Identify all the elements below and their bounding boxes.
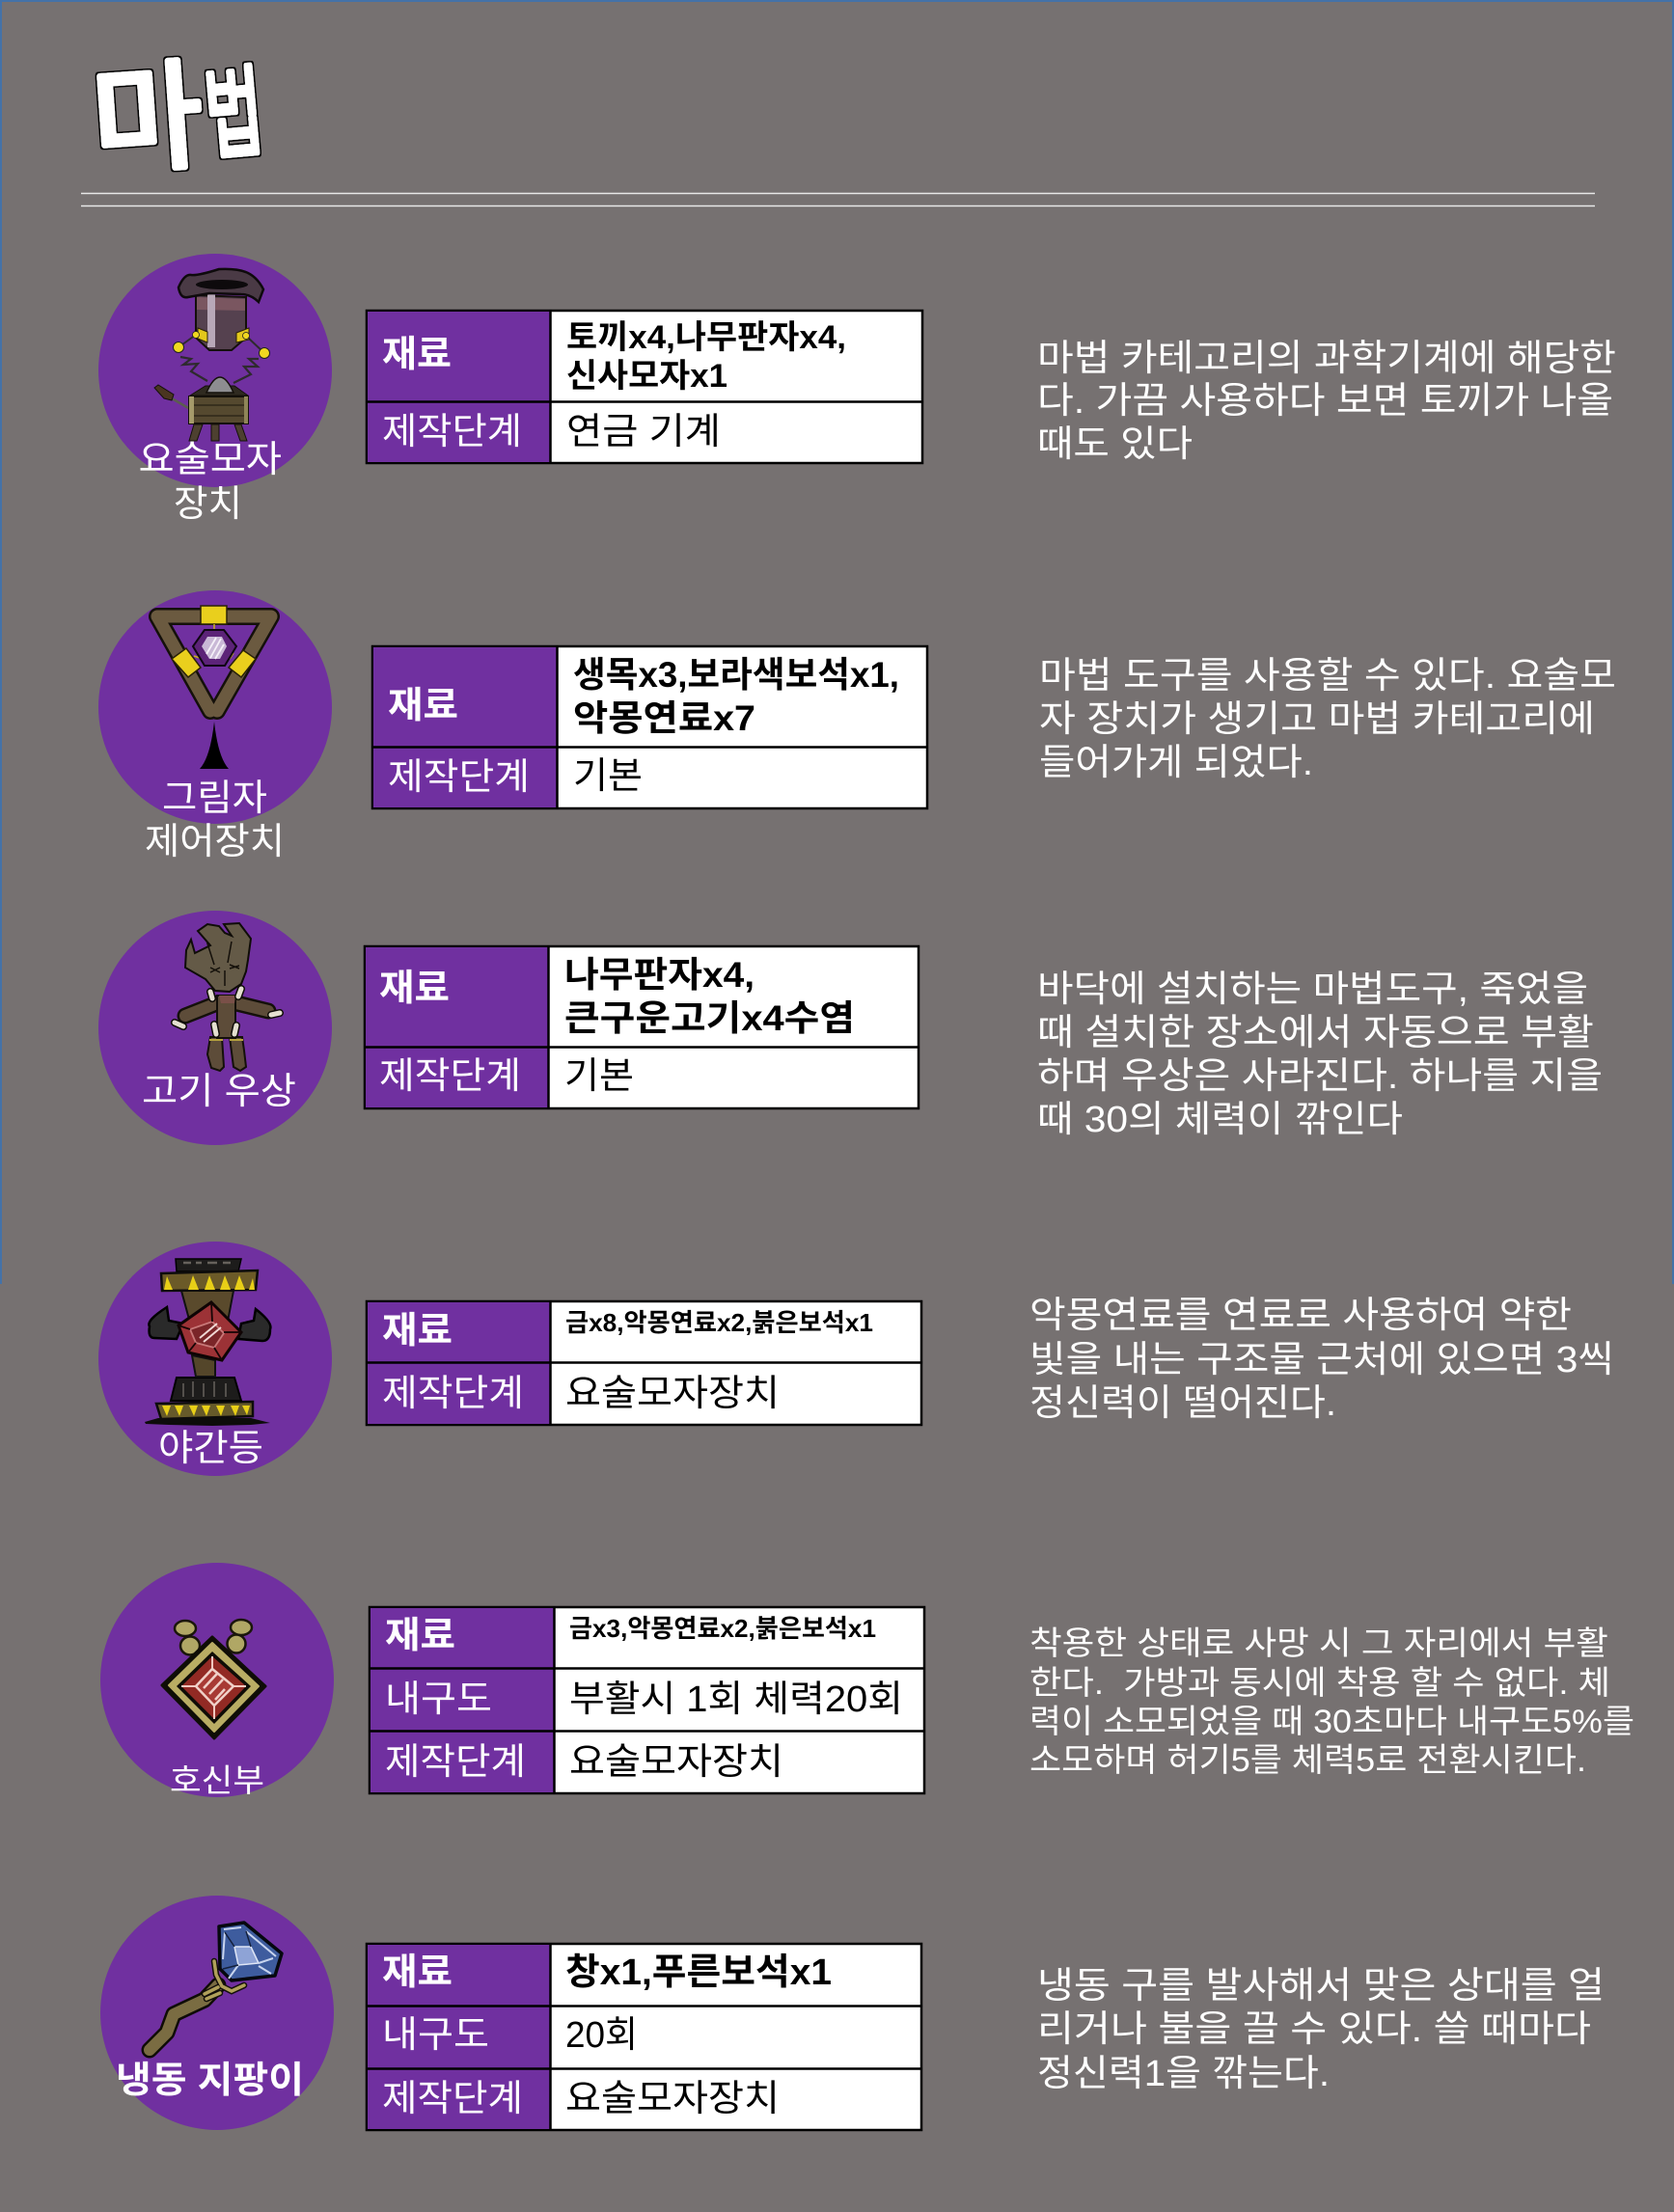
description: 요술모자 장치: 다. 가끔 사용하다 보면 토끼가 나올	[1037, 381, 1613, 422]
table: 고기 우상: 큰구운고기x4수염	[564, 998, 855, 1038]
description: 야간등: 정신력이 떨어진다.	[1029, 1383, 1336, 1424]
description: 호신부: 력이 소모되었을 때 30초마다 내구도5%를	[1029, 1704, 1634, 1740]
label: 요술모자 장치: 장치	[174, 484, 242, 525]
icon: night light	[145, 1259, 270, 1426]
table: 고기 우상: 나무판자x4,	[564, 955, 755, 995]
table: 냉동 지팡이	[367, 1944, 921, 2130]
icon: ice staff	[150, 1923, 282, 2050]
table: 냉동 지팡이: 20회	[565, 2015, 638, 2056]
description: 그림자 제어장치: 들어가게 되었다.	[1039, 743, 1313, 783]
table: 야간등: 요술모자장치	[565, 1374, 780, 1414]
table: 호신부: 부활시 1회 체력20회	[569, 1679, 903, 1720]
table: 냉동 지팡이: 내구도	[382, 2015, 489, 2056]
panel: 냉동 지팡이 badge	[100, 1896, 334, 2130]
description: 야간등: 악몽연료를 연료로 사용하여 약한	[1029, 1296, 1572, 1336]
table: 요술모자 장치: 신사모자x1	[566, 358, 727, 395]
description: 고기 우상: 때 설치한 장소에서 자동으로 부활	[1037, 1013, 1594, 1053]
title	[88, 50, 267, 190]
label: 요술모자 장치: 요술모자	[139, 440, 282, 480]
description: 호신부	[1029, 1625, 1634, 1779]
description: 호신부: 한다. 가방과 동시에 착용 할 수 없다. 체	[1029, 1665, 1610, 1702]
description: 냉동 지팡이	[1037, 1966, 1605, 2094]
description: 그림자 제어장치: 자 장치가 생기고 마법 카테고리에	[1039, 699, 1595, 740]
table: 호신부: 내구도	[385, 1679, 492, 1720]
table: 냉동 지팡이: 제작단계	[382, 2079, 523, 2119]
description: 그림자 제어장치: 마법 도구를 사용할 수 있다. 요술모	[1039, 656, 1616, 696]
label: 요술모자 장치	[139, 440, 282, 525]
table: 야간등: 재료	[382, 1311, 453, 1352]
table: 냉동 지팡이: 재료	[382, 1953, 453, 1993]
description: 요술모자 장치: 때도 있다	[1037, 424, 1193, 465]
description: 고기 우상: 때 30의 체력이 깎인다	[1037, 1100, 1403, 1140]
table: 고기 우상: 재료	[379, 969, 450, 1009]
panel: 야간등 badge	[98, 1242, 332, 1476]
description: 요술모자 장치	[1037, 339, 1616, 465]
description: 호신부: 소모하며 허기5를 체력5로 전환시킨다.	[1029, 1742, 1586, 1779]
table: 호신부: 요술모자장치	[569, 1742, 783, 1783]
label: 야간등: 야간등	[158, 1429, 263, 1469]
description: 그림자 제어장치	[1039, 656, 1616, 783]
table: 그림자 제어장치: 생목x3,보라색보석x1,	[573, 655, 899, 695]
table: 요술모자 장치	[367, 311, 922, 463]
table: 야간등	[367, 1301, 921, 1425]
table: 그림자 제어장치: 제작단계	[388, 757, 530, 798]
table: 호신부: 재료	[385, 1616, 455, 1656]
panel: 호신부 badge	[100, 1563, 334, 1798]
description: 냉동 지팡이: 리거나 불을 끌 수 있다. 쓸 때마다	[1037, 2009, 1591, 2050]
table: 고기 우상: 기본	[564, 1056, 634, 1097]
label: 그림자 제어장치: 제어장치	[145, 822, 285, 862]
table: 그림자 제어장치: 악몽연료x7	[573, 698, 755, 738]
table: 그림자 제어장치	[372, 646, 927, 808]
table: 호신부: 금x3,악몽연료x2,붉은보석x1	[569, 1614, 876, 1643]
table: 고기 우상	[365, 946, 919, 1108]
label: 냉동 지팡이: 냉동 지팡이	[116, 2061, 304, 2101]
icon: meat effigy	[175, 923, 280, 1071]
description: 요술모자 장치: 마법 카테고리의 과학기계에 해당한	[1037, 339, 1616, 379]
title: 법	[201, 58, 267, 173]
table: 냉동 지팡이: 요술모자장치	[565, 2079, 780, 2119]
table: 호신부: 제작단계	[385, 1742, 526, 1783]
title: 마	[88, 50, 207, 190]
description: 고기 우상	[1037, 969, 1603, 1140]
icon: prestihatitator	[154, 269, 270, 441]
table: 요술모자 장치: 재료	[382, 335, 452, 375]
panel: 그림자 제어장치 badge	[98, 590, 332, 862]
table: 고기 우상: 제작단계	[379, 1056, 521, 1097]
table: 그림자 제어장치: 기본	[573, 756, 643, 797]
panel: 요술모자 장치 badge	[98, 254, 332, 525]
icon: shadow manipulator	[157, 606, 271, 769]
table: 요술모자 장치: 토끼x4,나무판자x4,	[566, 319, 846, 356]
description: 냉동 지팡이: 냉동 구를 발사해서 맞은 상대를 얼	[1037, 1966, 1605, 2007]
description: 야간등: 빛을 내는 구조물 근처에 있으면 3씩	[1029, 1340, 1614, 1380]
table: 요술모자 장치: 제작단계	[382, 412, 522, 452]
table: 그림자 제어장치: 재료	[388, 686, 458, 726]
table: 요술모자 장치: 연금 기계	[566, 412, 721, 452]
description: 야간등	[1029, 1296, 1614, 1424]
table: 냉동 지팡이: 창x1,푸른보석x1	[565, 1953, 832, 1993]
table: 야간등: 제작단계	[382, 1374, 524, 1414]
label: 호신부: 호신부	[170, 1762, 264, 1798]
description: 호신부: 착용한 상태로 사망 시 그 자리에서 부활	[1029, 1625, 1608, 1662]
panel: 고기 우상 badge	[98, 911, 332, 1145]
description: 고기 우상: 바닥에 설치하는 마법도구, 죽었을	[1037, 969, 1588, 1010]
icon: life amulet	[162, 1620, 265, 1738]
label: 그림자 제어장치	[145, 778, 285, 862]
label: 그림자 제어장치: 그림자	[162, 778, 267, 819]
label: 고기 우상: 고기 우상	[142, 1072, 296, 1112]
table: 야간등: 금x8,악몽연료x2,붉은보석x1	[565, 1308, 873, 1337]
table: 호신부	[370, 1607, 924, 1793]
description: 냉동 지팡이: 정신력1을 깎는다.	[1037, 2054, 1330, 2094]
description: 고기 우상: 하며 우상은 사라진다. 하나를 지을	[1037, 1056, 1603, 1097]
